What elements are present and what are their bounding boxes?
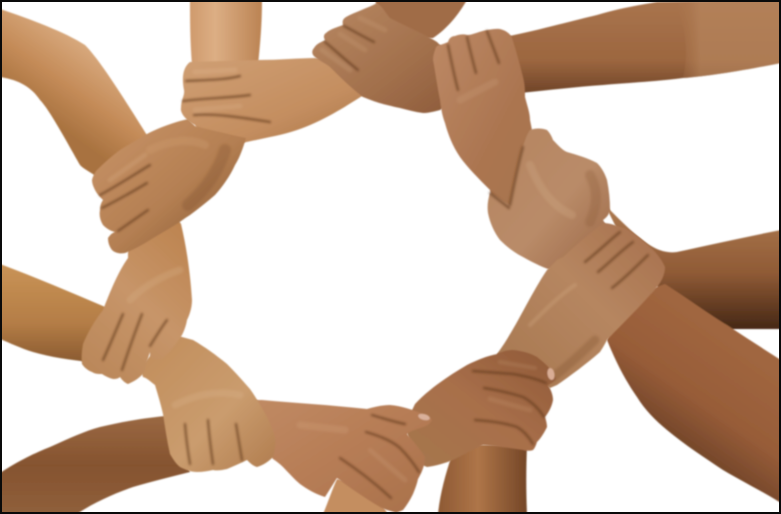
fingernail [547,367,555,381]
hand: second from top, fingers pointing left [181,58,375,143]
hand: left, fingers pointing down [82,215,192,384]
arm: top vertical [190,0,262,140]
hand: lower left, fingers pointing down [140,332,275,472]
arm: bottom centre right [438,445,527,514]
hand: lower right, fingers pointing right [405,350,556,467]
arm: left [0,264,110,362]
arm: lower right [607,284,781,503]
hand: bottom, fingers pointing right [252,400,432,513]
hand: top right, fingers pointing up [433,29,532,215]
hand: right lower, fingers pointing upper right [497,223,665,388]
arm: top right diagonal [375,0,467,40]
hand: top left, fingers pointing lower left [92,119,246,253]
arm: right upper [500,0,781,93]
hand: top centre, fingers pointing left [312,3,455,113]
arm: bottom centre left [323,479,388,514]
arm: right middle [605,205,781,329]
fingernail [417,413,431,421]
hand: right upper, back of hand with thumb [488,128,612,272]
arm: top left [0,9,150,185]
arm: bottom left [0,416,190,514]
arm: right upper lighter section [672,0,781,78]
